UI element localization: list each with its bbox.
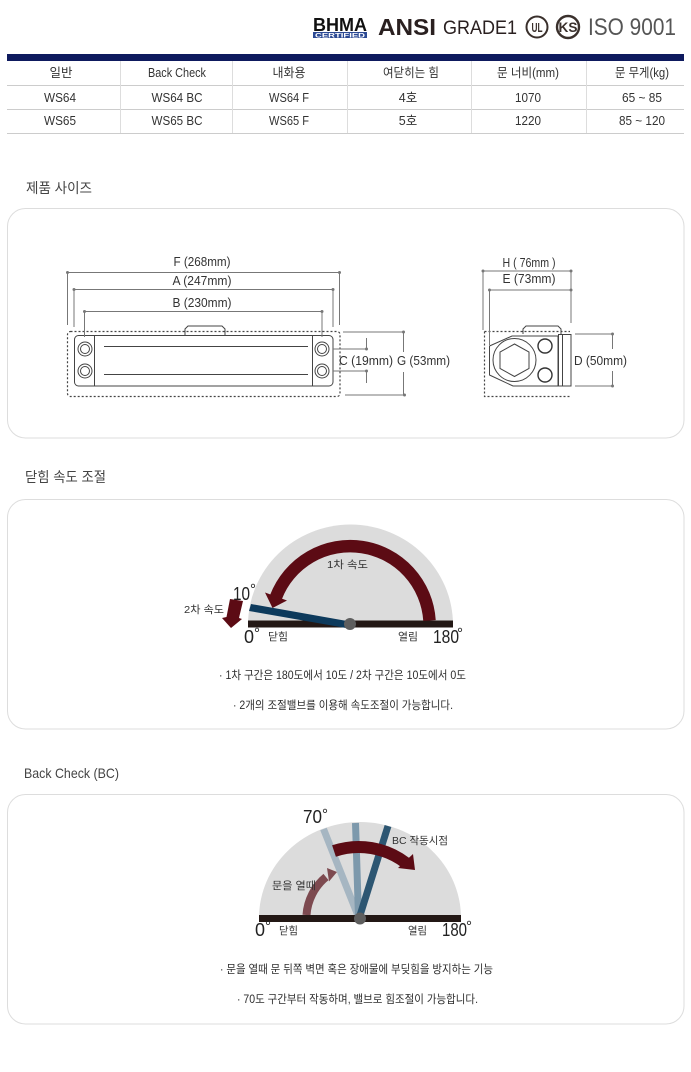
table row WS64: 1070 (515, 91, 541, 105)
table row WS65: 5호 (399, 114, 417, 128)
table header row (49, 66, 669, 80)
heading: Back Check: Back Check (BC) (24, 765, 119, 781)
label: when opening door: 문을 열때 (272, 880, 316, 892)
logo: KS: KS (558, 19, 578, 35)
arrow: opening door (306, 868, 337, 915)
label: 0 degrees: ° (265, 918, 271, 935)
dimension lines: F A B (66, 271, 341, 337)
arrow: second stage speed (222, 599, 243, 628)
hinge point (344, 618, 356, 630)
table row WS64: WS64 F (269, 91, 309, 105)
dimension label H: H ( 76mm ) (502, 256, 556, 270)
table row WS65: 85 ~ 120 (619, 114, 665, 128)
label: closed: 닫힘 (268, 631, 288, 643)
table header row: 문 무게(kg) (615, 66, 669, 80)
dimension label F: F (268mm) (174, 255, 230, 269)
label: 180 degrees: ° (466, 918, 472, 935)
heading: closing speed adjustment: 닫힘 속도 조절 (25, 469, 106, 485)
table header row: 여닫히는 힘 (383, 66, 439, 80)
logo: UL (526, 16, 548, 38)
speed dial chart (184, 525, 463, 647)
label: BC start point: BC 작동시점 (392, 835, 448, 847)
front view drawing (68, 326, 340, 396)
specification table (7, 54, 684, 134)
label: open: 열림 (408, 925, 427, 937)
table header row: 내화용 (272, 66, 306, 80)
panel: back check (8, 794, 684, 1024)
dimension label D: D (50mm) (574, 354, 627, 368)
panel: closing speed (8, 500, 684, 729)
label: 0 degrees (244, 625, 260, 647)
table row WS64 (44, 91, 662, 105)
dimension lines: H E D (482, 270, 614, 388)
table header row: Back Check (148, 66, 207, 80)
label: 70 degrees: ° (322, 806, 328, 823)
table header row: 일반 (49, 66, 73, 80)
logo: KS (557, 16, 579, 38)
logo: UL: UL (532, 20, 543, 35)
arrow: first stage speed (265, 546, 430, 620)
arrow: back check range (334, 847, 415, 870)
label: 0 degrees: 0 (255, 920, 265, 940)
label: 2nd speed: 2차 속도 (184, 604, 224, 616)
table row WS65: WS65 (44, 114, 76, 128)
label: 180 degrees: ° (457, 625, 463, 642)
dimension label E: E (73mm) (502, 272, 556, 286)
panel: product size (8, 208, 684, 438)
needle: 10 degree door position (249, 604, 347, 628)
table row WS65: WS65 BC (152, 114, 202, 128)
logo: BHMA certified: BHMA (313, 15, 367, 35)
table row WS65: 1220 (515, 114, 541, 128)
logo: ANSI: ANSI (378, 14, 436, 40)
dimension label A: A (247mm) (172, 274, 232, 288)
needle: 70 degree (324, 829, 358, 917)
label: 0 degrees (255, 918, 271, 940)
table row WS65: WS65 F (269, 114, 309, 128)
caption line 2: · 2개의 조절밸브를 이용해 속도조절이 가능합니다. (233, 698, 453, 712)
logo: Grade 1: GRADE1 (443, 18, 517, 39)
table header row: 문 너비(mm) (497, 66, 559, 80)
label: 180 degrees: 180 (433, 627, 459, 647)
needle: back check start (360, 826, 388, 917)
table row WS64: WS64 BC (152, 91, 202, 105)
caption line 1: · 1차 구간은 180도에서 10도 / 2차 구간은 10도에서 0도 (219, 669, 466, 682)
dimension lines: C G (333, 330, 406, 396)
label: 1st speed: 1차 속도 (327, 559, 368, 571)
label: 0 degrees: ° (254, 625, 260, 642)
dimension label G: G (53mm) (397, 354, 450, 368)
table row WS64: WS64 (44, 91, 76, 105)
dimension label B: B (230mm) (172, 296, 232, 310)
table row WS65 (44, 114, 665, 128)
certification logos (313, 14, 676, 41)
needle: mid position (356, 823, 358, 917)
heading: product size: 제품 사이즈 (26, 180, 92, 196)
dimension label C: C (19mm) (339, 354, 393, 368)
logo: ISO 9001: ISO 9001 (588, 14, 676, 41)
caption line 1: · 문을 열때 문 뒤쪽 벽면 혹은 장애물에 부딪힘을 방지하는 기능 (220, 962, 493, 976)
label: 10 degrees: 10 (233, 584, 250, 604)
label: open: 열림 (398, 631, 418, 643)
label: closed: 닫힘 (279, 925, 298, 937)
label: 180 degrees: 180 (442, 920, 467, 940)
logo: BHMA certified: CERTIFIED (315, 34, 366, 40)
table row WS64: 65 ~ 85 (622, 91, 662, 105)
hinge point (354, 912, 366, 924)
caption line 2: · 70도 구간부터 작동하며, 밸브로 힘조절이 가능합니다. (237, 992, 478, 1006)
back check dial chart (255, 806, 472, 940)
side view drawing (484, 326, 571, 396)
label: 10 degrees: ° (250, 581, 256, 598)
label: 70 degrees: 70 (303, 807, 322, 827)
table row WS64: 4호 (399, 91, 417, 105)
label: 0 degrees: 0 (244, 627, 254, 647)
